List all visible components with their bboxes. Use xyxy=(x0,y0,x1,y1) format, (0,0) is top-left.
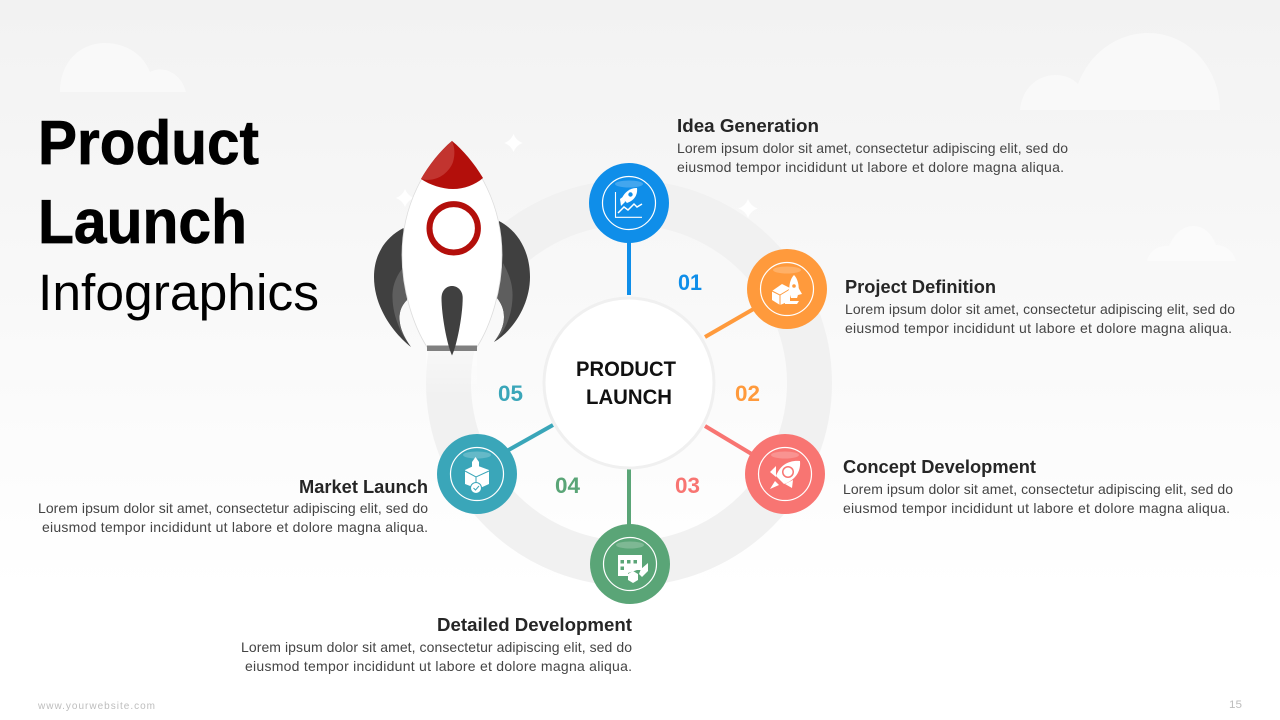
text: Concept Development: eiusmod tempor incididunt ut labore et dolore magna aliqua. xyxy=(843,500,1230,516)
text: Project Definition: Project Definition xyxy=(845,277,996,297)
step numbers: 02 xyxy=(735,381,760,406)
rocket exhaust trail xyxy=(426,351,477,396)
rocket nose xyxy=(421,141,483,189)
step numbers: 04 xyxy=(555,473,581,498)
node 03: red xyxy=(745,434,825,514)
rocket window xyxy=(430,204,478,252)
text: Concept Development: Lorem ipsum dolor sit amet, consectetur adipiscing elit, sed do xyxy=(843,481,1233,497)
cloud: middle right xyxy=(1147,226,1236,261)
text: Detailed Development: Lorem ipsum dolor sit amet, consectetur adipiscing elit, sed do xyxy=(241,639,632,655)
title: Launch xyxy=(38,188,247,257)
rocket xyxy=(374,141,530,356)
text: Idea Generation xyxy=(677,116,1068,175)
rocket body xyxy=(402,141,502,347)
icon: package with check xyxy=(465,457,489,494)
text: Idea Generation: eiusmod tempor incididunt ut labore et dolore magna aliqua. xyxy=(677,159,1064,175)
icon: rocket with coin xyxy=(770,461,800,489)
outer ring xyxy=(448,202,810,564)
icon: calendar and box xyxy=(618,555,648,583)
rocket center fin xyxy=(442,286,463,356)
rocket right inner fin xyxy=(494,263,513,342)
cloud: top left xyxy=(60,43,186,92)
node 04: green xyxy=(590,524,670,604)
text: Market Launch: eiusmod tempor incididunt ut labore et dolore magna aliqua. xyxy=(42,519,428,535)
text: Idea Generation: Lorem ipsum dolor sit amet, consectetur adipiscing elit, sed do xyxy=(677,140,1068,156)
title: Infographics xyxy=(38,264,319,321)
text: Project Definition: Lorem ipsum dolor sit amet, consectetur adipiscing elit, sed do xyxy=(845,301,1235,317)
page number: 15 xyxy=(1229,699,1242,711)
node 05: teal xyxy=(437,434,517,514)
step numbers: 05 xyxy=(498,381,523,406)
text: Detailed Development: eiusmod tempor incididunt ut labore et dolore magna aliqua. xyxy=(245,658,632,674)
rocket right fin xyxy=(494,221,530,342)
node 02: orange xyxy=(747,249,827,329)
center circle xyxy=(544,298,714,468)
footer url: www.yourwebsite.com xyxy=(37,701,155,712)
rocket left fin xyxy=(374,228,411,347)
text: Idea Generation: Idea Generation xyxy=(677,116,819,136)
step numbers: 03 xyxy=(675,473,700,498)
center circle: LAUNCH xyxy=(586,386,672,409)
sparkles xyxy=(396,134,758,218)
step numbers xyxy=(498,270,760,498)
icon: rocket and chart xyxy=(616,188,642,217)
connector lines xyxy=(505,240,757,528)
node 01: blue xyxy=(589,163,669,243)
text: Project Definition: eiusmod tempor incididunt ut labore et dolore magna aliqua. xyxy=(845,320,1232,336)
text: Concept Development: Concept Development xyxy=(843,457,1036,477)
text: Detailed Development xyxy=(241,615,632,674)
icon: box and rocket xyxy=(772,275,802,305)
rocket nose highlight xyxy=(421,141,454,180)
rocket left inner fin xyxy=(392,269,411,347)
text: Project Definition xyxy=(845,277,1235,336)
title xyxy=(38,109,319,321)
text: Detailed Development: Detailed Development xyxy=(437,615,632,635)
center circle: PRODUCT xyxy=(576,358,676,381)
text: Market Launch xyxy=(38,477,428,535)
cloud: top right xyxy=(1020,33,1220,110)
text: Market Launch: Lorem ipsum dolor sit amet, consectetur adipiscing elit, sed do xyxy=(38,500,428,516)
title: Product xyxy=(38,109,259,178)
rocket base xyxy=(427,346,477,351)
text: Concept Development xyxy=(843,457,1233,516)
step numbers: 01 xyxy=(678,270,702,295)
text: Market Launch: Market Launch xyxy=(299,477,428,497)
